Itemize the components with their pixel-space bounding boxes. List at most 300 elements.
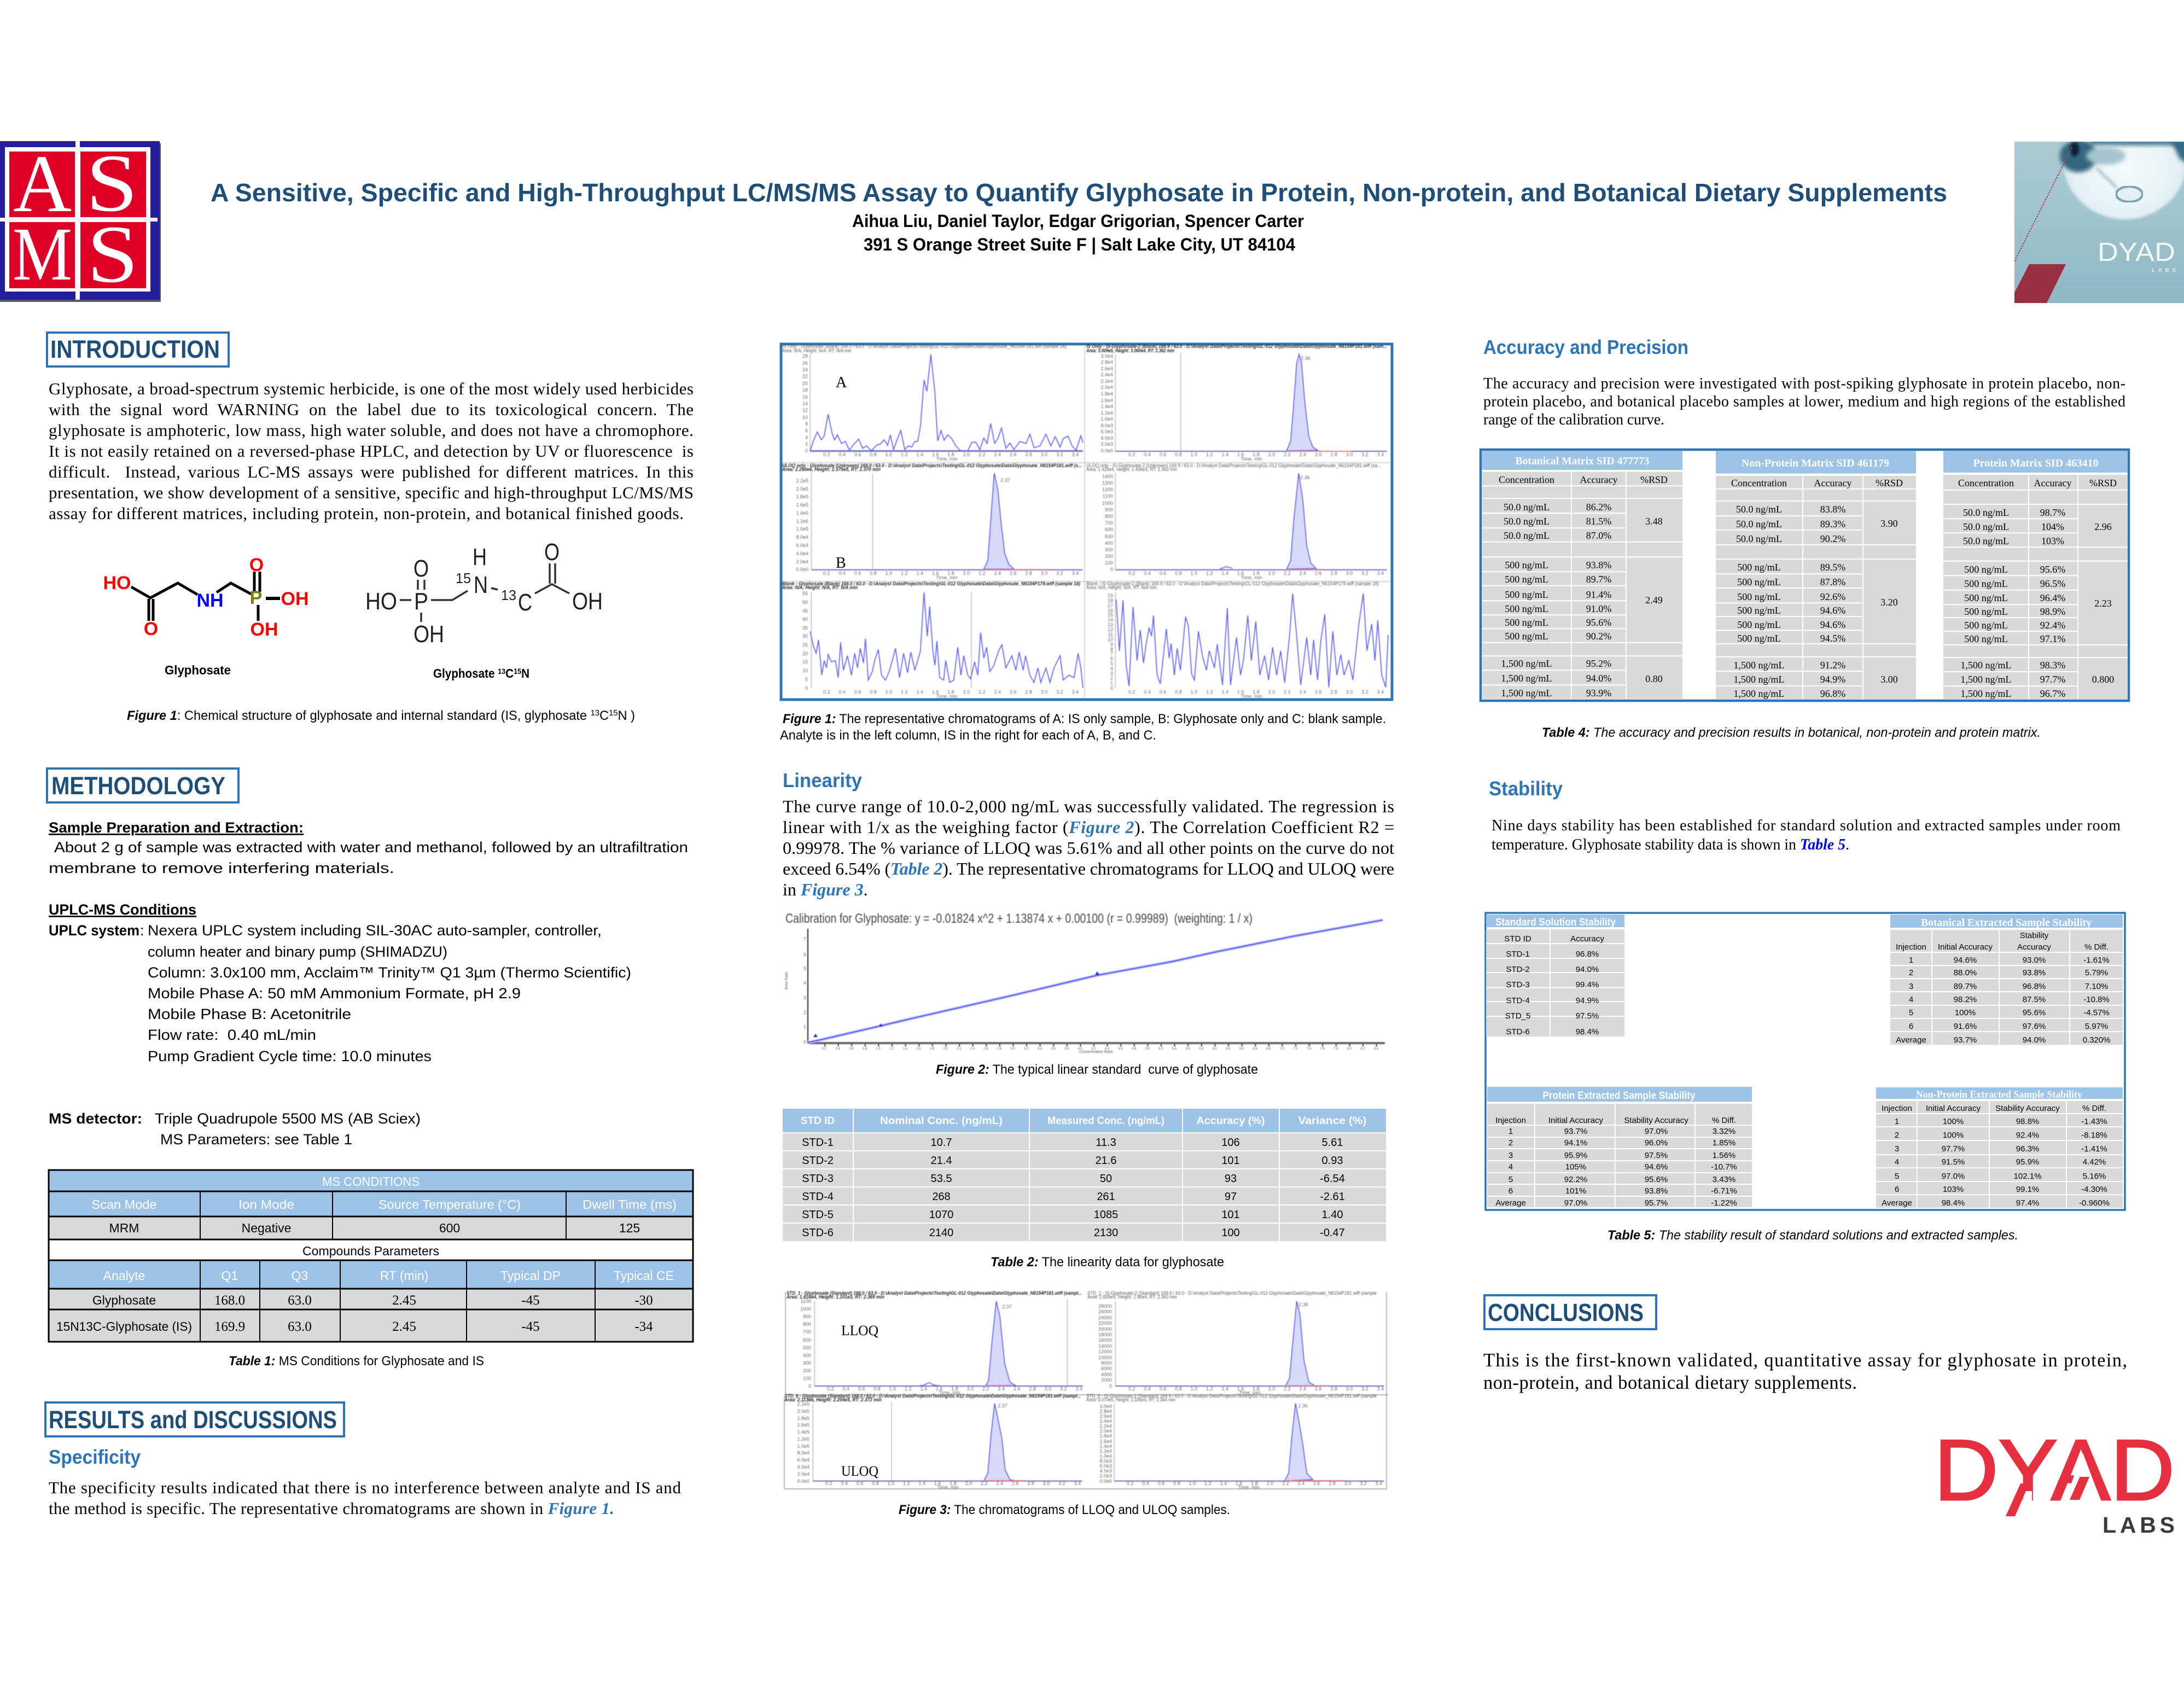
chart: calibration curve: 2 — [803, 1010, 806, 1015]
logo: ASMS: A — [13, 138, 72, 229]
chemical structure: internal standard: 13 — [501, 587, 516, 603]
panel: botanical matrix: 81.5% — [1586, 516, 1611, 527]
figure: chromatograms A, B, C: 26 — [802, 360, 808, 366]
panel: non-protein extracted sample stability: 97.7% — [1942, 1144, 1965, 1154]
figure: chromatograms A, B, C: 2.0e5 — [796, 486, 808, 492]
figure: chromatograms A, B, C: 13 — [1108, 622, 1113, 627]
figure: chromatograms A, B, C — [781, 344, 1392, 700]
panel: non-protein matrix — [1716, 451, 1916, 700]
panel: protein matrix: 98.9% — [2040, 606, 2065, 617]
text block: introduction: difficult. Instead, various LC-MS assays were published for different matrices. In this — [49, 462, 694, 481]
panel: non-protein matrix: 3.00 — [1880, 674, 1898, 685]
figure: LLOQ and ULOQ chromatograms: 12000 — [1098, 1349, 1112, 1354]
figure: chromatograms A, B, C: 8.0e4 — [796, 534, 808, 540]
panel: botanical extracted sample stability: Injection — [1896, 942, 1926, 952]
panel: protein matrix: Protein Matrix SID 463410 — [1973, 457, 2098, 469]
panel: standard solution stability: STD-1 — [1506, 950, 1530, 959]
panel: botanical extracted sample stability: 93.7% — [1954, 1035, 1977, 1045]
panel: botanical matrix: 500 ng/mL — [1505, 589, 1548, 600]
panel: protein matrix: 92.4% — [2040, 620, 2065, 631]
figure: LLOQ and ULOQ chromatograms: 0 — [808, 1383, 811, 1389]
table 1: MS conditions: Scan Mode — [92, 1197, 156, 1212]
panel: botanical extracted sample stability: 93.8% — [2023, 968, 2046, 977]
text block: introduction: Glyphosate, a broad-spectrum systemic herbicide, is one of the most widely used herbicides — [49, 379, 694, 398]
figure: LLOQ and ULOQ chromatograms: 1000 — [800, 1306, 811, 1312]
panel: botanical matrix: 93.9% — [1586, 688, 1611, 699]
figure: chromatograms A, B, C: 3 — [1110, 671, 1113, 676]
figure: chromatograms A, B, C: 1.4e4 — [1100, 404, 1113, 409]
figure: chromatograms A, B, C: 2.8e4 — [1100, 359, 1113, 365]
figure: chromatograms A, B, C: 1.0e4 — [1100, 416, 1113, 422]
text block: linearity: exceed 6.54% (Table 2). The representative chromatograms for LLOQ and ULOQ were — [783, 859, 1394, 878]
figure: chromatograms A, B, C: 1.8e5 — [796, 494, 808, 499]
panel: non-protein matrix: 50.0 ng/mL — [1736, 504, 1782, 515]
panel: protein extracted sample stability: 93.7% — [1564, 1127, 1587, 1136]
panel: non-protein matrix: 94.6% — [1820, 619, 1845, 630]
figure: LLOQ and ULOQ chromatograms: 1.8e4 — [1099, 1433, 1112, 1439]
panel: non-protein matrix: 500 ng/mL — [1737, 591, 1781, 602]
text block: specificity: The specificity results indicated that there is no interference between analyte and IS and — [49, 1478, 682, 1497]
figure: LLOQ and ULOQ chromatograms: 800 — [803, 1322, 811, 1327]
figure: chromatograms A, B, C: B — [836, 555, 846, 572]
text block: accuracy and precision — [1483, 375, 2125, 428]
figure: chromatograms A, B, C: 40 — [802, 616, 808, 622]
trace: A analyte — [810, 354, 1083, 451]
table 1: MS conditions: 2.45 — [392, 1319, 416, 1334]
text block: introduction: glyphosate is amphoteric, low mass, high water soluble, and does not have a chromophore. — [49, 421, 694, 440]
figure: LLOQ and ULOQ chromatograms: 4.0e3 — [1099, 1468, 1112, 1474]
chart: calibration curve: 7 — [803, 936, 806, 942]
figure: chromatograms A, B, C: 2.2e5 — [796, 478, 808, 484]
panel: non-protein extracted sample stability: 2 — [1895, 1131, 1899, 1140]
table 1: MS conditions: 2.45 — [392, 1293, 416, 1308]
panel: protein matrix — [1943, 451, 2128, 700]
panel: protein matrix: 98.3% — [2040, 660, 2065, 671]
panel: botanical extracted sample stability: 1 — [1909, 956, 1913, 965]
chart: calibration curve: Concentration Ratio — [1079, 1050, 1113, 1054]
panel: botanical extracted sample stability: 7.10% — [2085, 982, 2108, 991]
table 1: MS conditions: RT (min) — [380, 1268, 428, 1283]
panel: non-protein matrix: 3.90 — [1880, 518, 1898, 529]
panel: protein extracted sample stability: 4 — [1509, 1162, 1513, 1172]
panel: botanical matrix: 91.4% — [1586, 589, 1611, 600]
figure: chromatograms A, B, C: 16 — [1108, 608, 1113, 613]
figure: chromatograms A, B, C: 4 — [805, 435, 808, 440]
figure: chromatograms A, B, C: 55 — [802, 591, 808, 596]
panel: botanical matrix: 86.2% — [1586, 502, 1611, 513]
table 1: MS conditions: Typical DP — [500, 1268, 561, 1283]
figure: chromatograms A, B, C: ULOQ only - IS-Glyphosate-2 (Unknown) 169.9 / 63.0 - D:\Analyst Data\Projects\Testing\GL-012 Glyphosate\Data\Glyphosate_N6154P181.wiff (sa... — [1086, 463, 1381, 469]
chemical structure: internal standard: P — [414, 588, 428, 615]
text block: linearity — [783, 796, 1394, 899]
text block: linearity: in Figure 3. — [783, 880, 868, 899]
caption: figure 2: Figure 2: The typical linear standard curve of glyphosate — [936, 1062, 1258, 1077]
panel: botanical matrix: Concentration — [1499, 474, 1554, 485]
table 1: MS conditions: Glyphosate — [92, 1293, 156, 1307]
figure: LLOQ and ULOQ chromatograms: 100 — [803, 1376, 811, 1381]
panel: protein matrix: 50.0 ng/mL — [1963, 521, 2009, 532]
panel: non-protein matrix: 1,500 ng/mL — [1734, 674, 1784, 685]
text block: specificity — [49, 1478, 682, 1518]
figure: chromatograms A, B, C: 4 — [1110, 666, 1113, 671]
chart: calibration curve: 0.2 0.4 0.6 0.8 1.0 1.2 1.4 1.6 1.8 2.0 2.2 2.4 2.6 2.8 3.0 3.2 3.4 3.6 3.8 4.0 4.2 4.4 4.6 4.8 5.0 5.2 5.4 5.6 5.8 6.0 6.2 6.4 6.6 6.8 7.0 7.2 7.4 7.6 7.8 8.0 8.2 8.4 — [822, 1047, 1379, 1051]
figure: LLOQ and ULOQ chromatograms: 8.0e3 — [1099, 1458, 1112, 1464]
chemical structure: internal standard: H — [473, 544, 487, 571]
panel: botanical extracted sample stability: 93.0% — [2023, 956, 2046, 965]
panel: non-protein extracted sample stability: 97.0% — [1942, 1172, 1965, 1181]
panel: protein matrix: Accuracy — [2034, 478, 2071, 488]
figure: chromatograms A, B, C: 3.0e4 — [1100, 353, 1113, 359]
text block: accuracy and precision: protein placebo, and botanical placebo samples at lower, medium and high regions of the established — [1483, 393, 2125, 410]
figure: LLOQ and ULOQ chromatograms: 900 — [803, 1314, 811, 1319]
panel: protein extracted sample stability: Injection — [1495, 1116, 1526, 1125]
panel: non-protein matrix: 3.20 — [1880, 597, 1898, 608]
figure: chromatograms A, B, C: 24 — [802, 367, 808, 372]
figure: chromatograms A, B, C: Blank - IS-Glyphosate-2 (Blank) 169.9 / 63.0 - D:\Analyst Data\Projects\Testing\GL-012 Glyphosate\Data\Glyphosate_N6154P179.wiff (sample 18) — [1086, 581, 1379, 587]
address: 391 S Orange Street Suite F | Salt Lake City, UT 84104 — [864, 235, 1295, 254]
table 1: MS conditions: Dwell Time (ms) — [583, 1197, 677, 1212]
panel: standard solution stability: 98.4% — [1576, 1027, 1599, 1037]
panel: botanical extracted sample stability: Initial Accuracy — [1938, 942, 1993, 952]
text block: MS detector: MS Parameters: see Table 1 — [160, 1131, 352, 1148]
figure: chromatograms A, B, C: 2 — [805, 441, 808, 447]
figure: LLOQ and ULOQ chromatograms: ULOQ — [841, 1463, 878, 1479]
panel: non-protein matrix: 96.8% — [1820, 688, 1845, 699]
figure: chromatograms A, B, C: 1.6e4 — [1100, 398, 1113, 403]
figure: LLOQ and ULOQ chromatograms: 1.4e5 — [797, 1429, 809, 1435]
panel: botanical matrix: 1,500 ng/mL — [1501, 688, 1552, 699]
trace: C IS — [1116, 593, 1388, 688]
table 1: MS conditions: 63.0 — [288, 1293, 312, 1308]
figure: chromatograms A, B, C: 900 — [1105, 507, 1113, 513]
text block: sample preparation — [49, 819, 688, 876]
figure: chromatograms A, B, C: 2.0e4 — [1100, 385, 1113, 390]
panel: botanical extracted sample stability: 5.97% — [2085, 1022, 2108, 1031]
panel: botanical extracted sample stability: -1.61% — [2083, 956, 2110, 965]
panel: protein matrix: 96.5% — [2040, 578, 2065, 589]
figure: chromatograms A, B, C: Time, min — [936, 456, 958, 462]
figure: LLOQ and ULOQ chromatograms: 4.0e4 — [797, 1464, 809, 1470]
figure: LLOQ and ULOQ chromatograms: 2.2e4 — [1099, 1423, 1112, 1429]
panel: botanical matrix: 3.48 — [1645, 516, 1663, 527]
panel: non-protein matrix: 500 ng/mL — [1737, 577, 1781, 587]
chemical structure: internal standard: N — [474, 572, 488, 598]
figure: chromatograms A, B, C: Time, min — [936, 694, 958, 699]
figure: chromatograms A, B, C: 12 — [802, 408, 808, 413]
figure: LLOQ and ULOQ chromatograms: 1.4e4 — [1099, 1443, 1112, 1449]
figure: chromatograms A, B, C: Area: N/A, Height: N/A, RT: N/A min — [782, 348, 852, 354]
trace: ULOQ analyte — [984, 1404, 1016, 1481]
table 2: linearity data: Accuracy (%) — [1197, 1115, 1265, 1127]
figure: LLOQ and ULOQ chromatograms: 1.0e5 — [797, 1443, 809, 1449]
caption: figure 1 chromatograms: Figure 1: The representative chromatograms of A: IS only sample, B: Glyphosate only and C: blank sample. — [783, 712, 1386, 726]
figure: chromatograms A, B, C: 300 — [1105, 547, 1113, 552]
panel: protein extracted sample stability: -6.71% — [1711, 1186, 1737, 1196]
panel: botanical extracted sample stability: Botanical Extracted Sample Stability — [1921, 917, 2092, 929]
table 2: linearity data: 2140 — [929, 1227, 953, 1239]
figure: LLOQ and ULOQ chromatograms: 600 — [803, 1337, 811, 1343]
figure: chromatograms A, B, C: 30 — [802, 633, 808, 639]
figure: chromatograms A, B, C: 0.2 0.4 0.6 0.8 1.0 1.2 1.4 1.6 1.8 2.0 2.2 2.4 2.6 2.8 3.0 3.2 3.4 — [1128, 689, 1384, 695]
caption: figure 1 structure: Figure 1: Chemical structure of glyphosate and internal standard (IS, glyphosate — [127, 708, 594, 723]
panel: non-protein matrix: 91.2% — [1820, 660, 1845, 671]
figure: chromatograms A, B, C: 0 — [805, 685, 808, 691]
panel: non-protein matrix: 500 ng/mL — [1737, 605, 1781, 616]
panel: non-protein matrix: 50.0 ng/mL — [1736, 533, 1782, 544]
table 1: MS conditions: Negative — [242, 1221, 291, 1235]
table 2: linearity data: Variance (%) — [1298, 1115, 1366, 1127]
table 2: linearity data: Nominal Conc. (ng/mL) — [880, 1115, 1003, 1127]
panel: botanical extracted sample stability: 87.5% — [2023, 995, 2046, 1004]
figure: LLOQ and ULOQ chromatograms: STD_1 - IS-Glyphosate-2 (Standard) 169.9 / 63.0 - D:\Analyst Data\Projects\Testing\GL-012 Glyphosate\Data\Glyphosate_N6154P181.wiff (sample — [1087, 1290, 1377, 1296]
figure: LLOQ and ULOQ chromatograms: 400 — [803, 1353, 811, 1358]
panel: non-protein extracted sample stability: 6 — [1895, 1185, 1899, 1194]
trace: B IS peak — [1286, 473, 1316, 569]
figure: chromatograms A, B, C: IS Only - IS-Glyphosate-2 (Blank) 169.9 / 63.0 - D:\Analyst Data\Projects\Testing\GL-012 Glyphosate\Data\Glyphosate_N6154P181.wiff (sam... — [1086, 344, 1387, 350]
figure: chromatograms A, B, C: 15 — [1108, 612, 1113, 618]
panel: protein matrix: %RSD — [2089, 478, 2117, 488]
panel: standard solution stability: STD-6 — [1506, 1027, 1530, 1037]
figure: chromatograms A, B, C: 0.0e0 — [1100, 448, 1113, 453]
panel: non-protein matrix: 94.6% — [1820, 605, 1845, 616]
label: glyphosate 13C15N: N — [521, 666, 529, 680]
panel: botanical extracted sample stability: Stability — [2020, 931, 2049, 940]
table 1: MS conditions: MRM — [109, 1221, 139, 1235]
text block: conclusions: This is the first-known validated, quantitative assay for glyphosate in protein, — [1483, 1350, 2127, 1371]
figure: chromatograms A, B, C: 0 — [805, 448, 808, 453]
panel: protein matrix: 95.6% — [2040, 564, 2065, 575]
figure: LLOQ and ULOQ chromatograms: 18000 — [1098, 1332, 1112, 1337]
text block: UPLC-MS conditions: UPLC-MS Conditions — [49, 901, 196, 918]
panel: protein extracted sample stability: 101% — [1565, 1186, 1586, 1196]
figure: LLOQ and ULOQ chromatograms: 2.0e3 — [1099, 1473, 1112, 1479]
chemical structure: internal standard: O — [413, 555, 429, 582]
panel: protein matrix: Concentration — [1958, 478, 2014, 488]
figure: LLOQ and ULOQ chromatograms: 0.0e0 — [797, 1479, 809, 1484]
text block: UPLC-MS conditions: : — [140, 922, 144, 939]
panel: protein extracted sample stability: 95.9% — [1564, 1151, 1587, 1160]
figure: chromatograms A, B, C: 35 — [802, 625, 808, 631]
figure: chromatograms A, B, C: 4.0e4 — [796, 551, 808, 556]
table 2: linearity data: 101 — [1221, 1155, 1240, 1167]
panel: protein extracted sample stability: 97.0% — [1645, 1127, 1668, 1136]
figure: chromatograms A, B, C: 9 — [1110, 642, 1113, 647]
table 2: linearity data: STD-3 — [802, 1173, 834, 1185]
panel: non-protein extracted sample stability: 5 — [1895, 1172, 1899, 1181]
chemical structure: internal standard — [365, 539, 603, 648]
panel: protein matrix: 500 ng/mL — [1964, 592, 2008, 603]
chemical structure: internal standard: 15 — [456, 570, 471, 586]
panel: protein matrix: 2.96 — [2094, 521, 2112, 532]
panel: botanical extracted sample stability: 6 — [1909, 1022, 1913, 1031]
trace: LLOQ analyte — [986, 1301, 1015, 1386]
figure: LLOQ and ULOQ chromatograms: STD_6 - Glyphosate (Standard) 168.0 / 63.0 - D:\Analyst Data\Projects\Testing\GL-012 Glyphosate\Data\Glyphosate_N6154P181.wiff (sampl... — [784, 1393, 1081, 1399]
figure: LLOQ and ULOQ chromatograms: 10000 — [1098, 1355, 1112, 1360]
table 2: linearity data: Measured Conc. (ng/mL) — [1047, 1115, 1164, 1127]
text block: linearity: linear with 1/x as the weighing factor (Figure 2). The Correlation Coefficient R2 = — [783, 817, 1394, 837]
chemical structure: glyphosate: OH — [281, 589, 308, 609]
text block: specificity: the method is specific. The representative chromatograms are shown in Figure 1. — [49, 1499, 614, 1518]
panel: protein extracted sample stability: 94.6% — [1645, 1162, 1668, 1172]
text block: MS detector: Triple Quadrupole 5500 MS (AB Sciex) — [155, 1110, 421, 1127]
figure: chromatograms A, B, C: 15 — [802, 659, 808, 665]
panel: standard solution stability: STD_5 — [1505, 1011, 1530, 1021]
panel: non-protein extracted sample stability: 96.3% — [2016, 1144, 2039, 1154]
panel: standard solution stability — [1486, 915, 1624, 1037]
text block: UPLC-MS conditions: UPLC system — [49, 922, 139, 939]
heading: methodology: METHODOLOGY — [51, 772, 225, 800]
panel: botanical matrix: 500 ng/mL — [1505, 574, 1548, 585]
figure: LLOQ and ULOQ chromatograms: 0.2 0.4 0.6 0.8 1.0 1.2 1.4 1.6 1.8 2.0 2.2 2.4 2.6 2.8 3.0 3.2 3.4 — [825, 1481, 1081, 1486]
figure: LLOQ and ULOQ chromatograms: STD_1 - Glyphosate (Standard) 168.0 / 63.0 - D:\Analyst Data\Projects\Testing\GL-012 Glyphosate\Data\Glyphosate_N6154P181.wiff (sampl... — [787, 1290, 1082, 1296]
caption: figure 1 chromatograms — [780, 712, 1386, 743]
table 2: linearity data: 1085 — [1094, 1209, 1118, 1221]
panel: botanical extracted sample stability: 100% — [1955, 1008, 1976, 1017]
panel: protein matrix: 50.0 ng/mL — [1963, 507, 2009, 518]
panel: protein extracted sample stability: Protein Extracted Sample Stability — [1542, 1090, 1696, 1102]
table 2: linearity data: 100 — [1221, 1227, 1240, 1239]
panel: protein extracted sample stability: 3.32% — [1713, 1127, 1735, 1136]
figure: chromatograms A, B, C: 4.0e3 — [1100, 435, 1113, 441]
panel: non-protein extracted sample stability: Stability Accuracy — [1995, 1104, 2060, 1113]
panel: protein extracted sample stability: Initial Accuracy — [1548, 1116, 1604, 1125]
table 1: MS conditions: Ion Mode — [238, 1197, 294, 1212]
text block: linearity: 0.99978. The % variance of LLOQ was 5.61% and all other points on the curve do not — [783, 838, 1394, 858]
figure: chromatograms A, B, C: 2.37 — [1000, 478, 1010, 483]
chemical structure: glyphosate: NH — [196, 590, 224, 611]
panel: protein extracted sample stability: 97.0% — [1564, 1198, 1587, 1208]
figure: chromatograms A, B, C: 1.2e4 — [1100, 410, 1113, 416]
figure: chromatograms A, B, C: 45 — [802, 608, 808, 614]
trace: B analyte peak — [984, 473, 1014, 569]
figure: LLOQ and ULOQ chromatograms: 0.0e0 — [1099, 1479, 1112, 1484]
panel: non-protein extracted sample stability: -0.960% — [2079, 1198, 2110, 1208]
figure: chromatograms A, B, C: 6.0e4 — [796, 543, 808, 548]
figure: LLOQ and ULOQ chromatograms: 16000 — [1098, 1337, 1112, 1343]
panel: standard solution stability: 94.0% — [1576, 965, 1599, 974]
label: glyphosate: Glyphosate — [165, 663, 231, 677]
figure: LLOQ and ULOQ chromatograms: 6000 — [1101, 1366, 1112, 1371]
figure: LLOQ and ULOQ chromatograms: 2.0e4 — [797, 1471, 809, 1477]
table 2: linearity data: 97 — [1225, 1191, 1237, 1203]
figure: LLOQ and ULOQ chromatograms: 1.2e4 — [1099, 1448, 1112, 1454]
chart: calibration curve: 0 — [803, 1039, 806, 1045]
panel: protein extracted sample stability: 2 — [1509, 1138, 1513, 1148]
figure: chromatograms A, B, C: 0.2 0.4 0.6 0.8 1.0 1.2 1.4 1.6 1.8 2.0 2.2 2.4 2.6 2.8 3.0 3.2 3.4 — [823, 689, 1079, 695]
panel: protein extracted sample stability: 94.1% — [1564, 1138, 1587, 1148]
table 1: MS conditions: 168.0 — [214, 1293, 245, 1308]
figure: LLOQ and ULOQ chromatograms: 1100 — [801, 1299, 811, 1304]
panel: non-protein matrix: 83.8% — [1820, 504, 1845, 515]
panel: non-protein matrix: 94.9% — [1820, 674, 1845, 685]
table 1: MS conditions: Typical CE — [614, 1268, 674, 1283]
figure: chromatograms A, B, C: 18 — [1108, 598, 1113, 603]
panel: non-protein extracted sample stability: Initial Accuracy — [1926, 1104, 1981, 1113]
figure: chromatograms A, B, C: 14 — [802, 401, 808, 406]
panel: non-protein extracted sample stability: 99.1% — [2016, 1185, 2039, 1194]
table 2: linearity data: STD-2 — [802, 1155, 834, 1167]
panel: non-protein extracted sample stability: % Diff. — [2082, 1104, 2106, 1113]
table 1: MS conditions: 63.0 — [288, 1319, 312, 1334]
panel: protein matrix: 104% — [2041, 521, 2064, 532]
panel: botanical extracted sample stability: 97.6% — [2023, 1022, 2046, 1031]
figure: LLOQ and ULOQ chromatograms: Area: 3.070e5, Height: 3.106e4, RT: 2.364 min — [1086, 1397, 1175, 1403]
panel: non-protein extracted sample stability: 100% — [1943, 1117, 1964, 1126]
figure: chromatograms A, B, C: 25 — [802, 642, 808, 648]
panel: non-protein extracted sample stability: 100% — [1943, 1131, 1964, 1140]
table 2: linearity data: 261 — [1097, 1191, 1115, 1203]
text block: MS detector — [49, 1110, 421, 1148]
logo: ASMS: M — [13, 212, 72, 296]
panel: protein extracted sample stability: -10.7% — [1711, 1162, 1737, 1172]
chemical structure: glyphosate: P — [250, 587, 262, 608]
panel: non-protein matrix: 500 ng/mL — [1737, 562, 1781, 573]
text block: linearity: The curve range of 10.0-2,000 ng/mL was successfully validated. The regression is — [783, 796, 1394, 816]
chemical structure: internal standard: OH — [413, 621, 444, 648]
heading: accuracy and precision: Accuracy and Precision — [1483, 336, 1688, 358]
panel: non-protein extracted sample stability: 98.8% — [2016, 1117, 2039, 1126]
panel: non-protein extracted sample stability: 102.1% — [2014, 1172, 2041, 1181]
table 1: MS conditions: 15N13C-Glyphosate (IS) — [56, 1319, 192, 1334]
figure: chromatograms A, B, C: 600 — [1105, 527, 1113, 532]
image: Dyad Labs banner — [2014, 142, 2184, 303]
figure: LLOQ and ULOQ chromatograms: 2.0e5 — [797, 1408, 809, 1414]
panel: protein matrix: 500 ng/mL — [1964, 606, 2008, 617]
panel: non-protein extracted sample stability: 92.4% — [2016, 1131, 2039, 1140]
figure: chromatograms A, B, C: 28 — [802, 353, 808, 359]
panel: botanical extracted sample stability: 94.6% — [1954, 956, 1977, 965]
figure: chromatograms A, B, C: Area: N/A, Height: N/A, RT: N/A min — [782, 585, 858, 591]
panel: botanical extracted sample stability: 88.0% — [1954, 968, 1977, 977]
figure: chromatograms A, B, C: 1.0e5 — [796, 526, 808, 532]
table 2: linearity data: STD-4 — [802, 1191, 834, 1203]
panel: botanical matrix: 91.0% — [1586, 603, 1611, 614]
panel: non-protein matrix: 500 ng/mL — [1737, 619, 1781, 630]
panel: protein matrix: 97.7% — [2040, 674, 2065, 685]
panel: protein extracted sample stability: 1 — [1509, 1127, 1513, 1136]
figure: chromatograms A, B, C: Area: 2.260e6, Height: 2.375e5, RT: 2.370 min — [782, 467, 881, 473]
panel: non-protein matrix: Concentration — [1731, 478, 1787, 488]
panel: botanical matrix: 0.80 — [1645, 673, 1663, 684]
figure: LLOQ and ULOQ chromatograms: 700 — [803, 1329, 811, 1335]
table 5: stability — [1486, 913, 2125, 1210]
figure: chromatograms A, B, C: 2 — [1110, 676, 1113, 681]
panel: botanical extracted sample stability: 5 — [1909, 1008, 1913, 1017]
table 2: linearity data: 93 — [1225, 1173, 1237, 1185]
text block: UPLC-MS conditions: Flow rate: 0.40 mL/min — [148, 1027, 316, 1043]
label: glyphosate 13C15N: Glyphosate — [433, 666, 502, 680]
panel: botanical extracted sample stability: 0.320% — [2083, 1035, 2110, 1045]
table 1: MS conditions — [49, 1170, 693, 1342]
caption: table 1: Table 1: MS Conditions for Glyphosate and IS — [229, 1354, 484, 1369]
panel: non-protein extracted sample stability: -1.43% — [2081, 1117, 2107, 1126]
chemical structure: glyphosate: O — [144, 619, 158, 639]
figure: LLOQ and ULOQ chromatograms: 26000 — [1098, 1309, 1112, 1314]
panel: botanical matrix — [1482, 451, 1682, 699]
table 2: linearity data: STD-6 — [802, 1227, 834, 1239]
figure: LLOQ and ULOQ chromatograms: 14000 — [1098, 1343, 1112, 1349]
panel: botanical extracted sample stability — [1890, 915, 2123, 1045]
chart: calibration curve: 6 — [803, 952, 806, 957]
trace: A IS peak — [1286, 354, 1318, 451]
panel: standard solution stability: 94.9% — [1576, 996, 1599, 1005]
panel: botanical extracted sample stability: -10.8% — [2083, 995, 2110, 1004]
label: glyphosate 13C15N: 15 — [514, 667, 521, 676]
figure: chromatograms A, B, C: Time, min — [1240, 456, 1262, 462]
text block: conclusions: non-protein, and botanical dietary supplements. — [1483, 1372, 1857, 1393]
figure: LLOQ and ULOQ chromatograms: 4000 — [1101, 1372, 1112, 1377]
figure: chromatograms A, B, C: 2.0e3 — [1100, 441, 1113, 447]
